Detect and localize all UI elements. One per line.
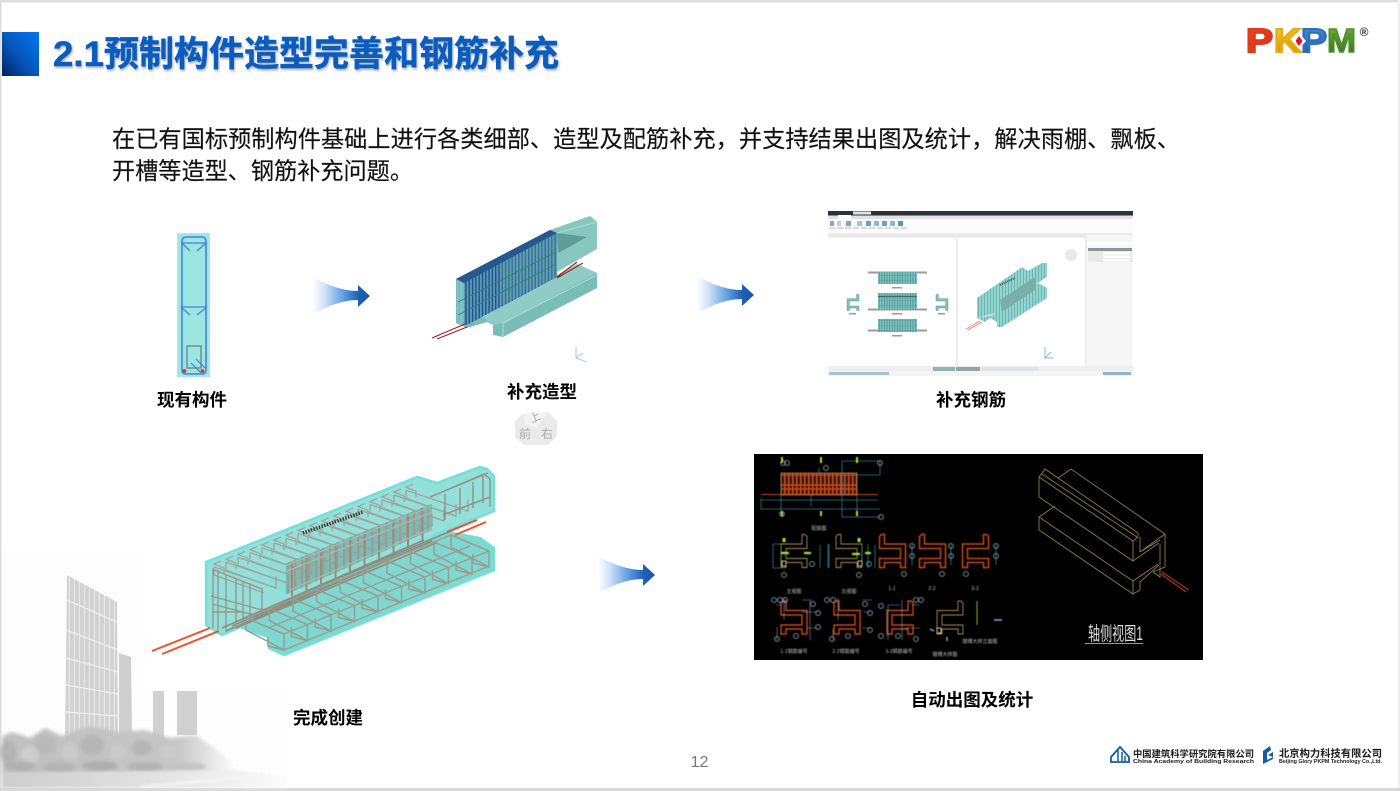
top stirrups: [214, 484, 468, 593]
section drawings: 3-3: [971, 586, 979, 592]
text: CABR: [1133, 748, 1255, 765]
lower stirrups: [246, 535, 489, 650]
left web rebars: [211, 568, 262, 632]
ribbon: [828, 215, 1133, 233]
end stirrups: [430, 473, 490, 520]
page number: 12: [691, 754, 708, 771]
lower flange: [240, 532, 494, 655]
text: CABR: 中国建筑科学研究院有限公司: [1133, 748, 1254, 759]
rebar number drawings: [772, 598, 1002, 658]
bar annotation: [303, 512, 363, 533]
arrow 3: [598, 556, 655, 594]
arrow 1: [313, 277, 370, 315]
PKPM logo: K: [1274, 22, 1301, 59]
intro text: 开槽等造型、钢筋补充问题。: [112, 158, 413, 184]
logo: PKPM S: [1263, 746, 1273, 764]
rib stirrups: [292, 508, 422, 596]
panel: existing component section: [177, 233, 210, 377]
title: 预制构件造型完善和钢筋补充: [104, 35, 559, 74]
title: 2.1: [53, 35, 104, 74]
rebar number drawings: 2-2钢筋编号: [832, 648, 860, 655]
axonometric red bars: [1161, 572, 1189, 592]
section drawings: 主视图: [786, 588, 802, 595]
coordinate axes: [576, 347, 587, 362]
panel: CAD drawing: [754, 454, 1203, 660]
view cube: 右: [541, 426, 553, 441]
rebar number drawings: 3-3钢筋编号: [885, 648, 913, 655]
rebar number drawings: 键槽大样立面图: [962, 638, 998, 645]
section drawings: 1-1: [888, 586, 896, 592]
rebar number drawings: 键槽大样图: [932, 651, 958, 658]
intro text: [112, 126, 1180, 184]
building: cut-off towers: [153, 691, 197, 745]
PKPM logo: P: [1246, 22, 1273, 59]
building: tall tower: [65, 575, 118, 738]
elevation drawing: [761, 457, 883, 532]
label: added rebar: 补充钢筋: [936, 390, 1006, 410]
beam lower flange: [456, 264, 597, 337]
text: Glory: [1279, 747, 1382, 765]
upper body: [206, 467, 494, 635]
arrow 2: [697, 276, 754, 314]
PKPM logo: P: [1301, 22, 1327, 59]
logo diamond: [1292, 33, 1306, 49]
registered mark: ®: [1360, 25, 1369, 39]
view cube: 上: [527, 409, 543, 426]
text: CABR: China Academy of Building Research: [1133, 759, 1255, 765]
right 3D view: [958, 235, 1085, 366]
panel: software screenshot: [828, 211, 1133, 376]
axonometric drawing: [1039, 469, 1165, 594]
panel: added shape 3D model: [432, 216, 597, 362]
PKPM logo: [1246, 22, 1369, 59]
section drawings: [773, 534, 998, 595]
intro text: 在已有国标预制构件基础上进行各类细部、造型及配筋补充，并支持结果出图及统计，解决雨棚、飘板、: [112, 126, 1180, 152]
long bars: [222, 523, 470, 631]
left drawing view: [828, 235, 956, 366]
section drawings: 左视图: [841, 588, 857, 595]
road: [2, 770, 287, 788]
section drawings: 2-2: [928, 586, 936, 592]
red bars: [152, 520, 486, 654]
axonometric caption: 轴侧视图1: [1088, 623, 1143, 645]
text: Glory: Beijing Glory PKPM Technology Co.,Ltd.: [1279, 759, 1382, 765]
label: added shape: 补充造型: [507, 382, 577, 402]
rebar number drawings: 1-1钢筋编号: [780, 648, 808, 655]
property panel: [1087, 235, 1133, 366]
label: existing component: 现有构件: [157, 390, 227, 410]
rebar cage: [456, 230, 557, 325]
elevation drawing: 配筋图: [811, 525, 827, 532]
PKPM logo: M: [1327, 22, 1356, 59]
title marker square: [2, 32, 39, 76]
beam upper arm: [550, 216, 597, 272]
rib panel: [268, 503, 432, 595]
label: completed: 完成创建: [293, 708, 363, 728]
panel: completed model: [152, 467, 494, 655]
text: Glory: 北京构力科技有限公司: [1279, 747, 1382, 760]
building: second tower: [119, 653, 132, 738]
label: auto drawing: 自动出图及统计: [911, 690, 1033, 710]
status bars: [828, 366, 1133, 376]
footer logos: [1111, 746, 1382, 765]
logo: CABR: [1111, 747, 1129, 762]
background: grey city photo: [0, 550, 288, 788]
red bars: [432, 262, 583, 339]
trees: [0, 726, 235, 775]
title bar: [828, 211, 1133, 216]
view cube: [515, 409, 557, 445]
view cube: 前: [519, 426, 531, 441]
